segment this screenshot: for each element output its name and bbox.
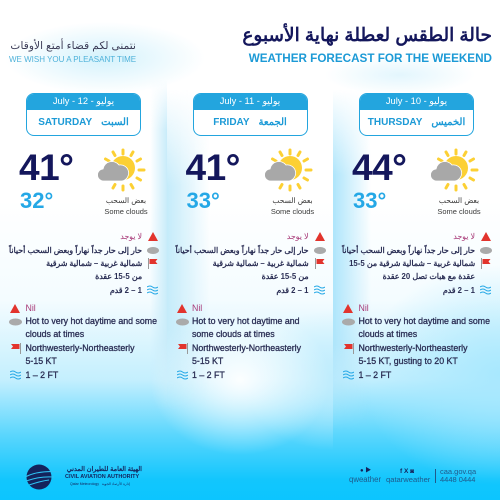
wind text: شمالية غربية – شمالية شرقية من 5-15: [349, 259, 475, 268]
weather text: Hot to very hot daytime and some: [26, 316, 157, 326]
date card: الخميس: [431, 117, 465, 128]
flag icon: [315, 258, 324, 269]
wave text: 1 – 2 قدم: [110, 286, 142, 295]
English details: [342, 302, 490, 380]
wind text: [358, 342, 468, 368]
wave text: 1 – 2 FT: [26, 370, 58, 380]
cloud icon: [314, 247, 326, 254]
divider: [435, 469, 436, 483]
app handle: qweather: [349, 474, 381, 484]
social icons: f X ◙: [400, 468, 414, 474]
wave icon: [177, 370, 188, 380]
panel: Thursday: [342, 93, 492, 380]
date card: [359, 93, 474, 136]
date card: THURSDAY: [368, 117, 422, 128]
wave icon: [480, 286, 491, 294]
wind text: شمالية غربية – شمالية شرقية: [46, 259, 142, 268]
warning icon: [343, 304, 353, 313]
warnings text: Nil: [358, 302, 369, 312]
weather text: حار إلى حار جداً نهاراً وبعض السحب أحياناً: [176, 246, 308, 255]
date card: [192, 93, 308, 136]
wave icon: [314, 286, 325, 294]
Arabic details: [175, 232, 326, 296]
heading: English title: WEATHER FORECAST FOR THE WEEKEND: [249, 52, 492, 65]
footer social and contact: [348, 466, 478, 494]
wind text: [192, 342, 302, 366]
high temperature: 41°: [186, 146, 240, 188]
icon: sun behind cloud: [265, 148, 312, 192]
phone: 4448 0444: [440, 474, 475, 484]
condition caption: Some clouds: [437, 207, 481, 216]
cloud icon: [147, 247, 159, 254]
panel: Friday: [175, 93, 326, 380]
weather text: some clouds at times: [192, 329, 275, 339]
date card: السبت: [101, 117, 129, 128]
condition caption: [437, 196, 481, 216]
icon: globe: [24, 464, 62, 490]
high temperature: 44°: [352, 146, 406, 188]
date card: الجمعة: [259, 117, 287, 128]
warning icon: [481, 232, 491, 241]
weather text: حار إلى حار جداً نهاراً وبعض السحب أحياناً: [9, 246, 142, 255]
wind text: 5-15 KT: [192, 356, 223, 366]
wind text: Northwesterly-Northeasterly: [358, 342, 468, 352]
icon: sun behind cloud: [431, 148, 478, 192]
weather text: حار إلى حار جداً نهاراً وبعض السحب أحياناً: [342, 246, 475, 255]
date card: FRIDAY: [213, 117, 250, 128]
wind text: [26, 342, 135, 366]
cloud icon: [9, 318, 22, 326]
wave icon: [343, 370, 354, 380]
department: Qatar Meteorology إدارة الأرصاد الجوية: [70, 482, 130, 486]
flag icon: [343, 343, 354, 354]
wind text: شمالية غربية – شمالية شرقية: [213, 259, 308, 268]
warning icon: [315, 232, 325, 241]
weather text: Hot to very hot daytime and: [192, 316, 300, 326]
authority name English: CIVIL AVIATION AUTHORITY: [65, 474, 139, 480]
wind text: Northwesterly-Northeasterly: [26, 342, 135, 352]
high temperature: 41°: [19, 146, 73, 188]
weather text: Hot to very hot daytime and some: [358, 316, 490, 326]
wind text: 5-15 KT: [26, 356, 57, 366]
date card: July - 11 - يوليو: [220, 96, 280, 106]
wave icon: [147, 286, 158, 294]
weather text: [26, 316, 157, 339]
icon: sun behind cloud: [98, 148, 146, 192]
weather text: [358, 315, 490, 342]
warnings text: Nil: [26, 302, 36, 312]
wind speed text: من 5-15 عقدة: [95, 272, 142, 281]
English details: [9, 302, 157, 380]
low temperature: 33°: [186, 188, 220, 213]
warnings text: Nil: [192, 302, 202, 312]
cloud icon: [480, 247, 492, 254]
wave text: 1 – 2 FT: [192, 370, 225, 380]
flag icon: [148, 258, 158, 269]
low temperature: 32°: [20, 188, 53, 213]
cloud icon: [342, 318, 355, 326]
condition caption: بعض السحب: [106, 196, 146, 205]
wave text: 1 – 2 قدم: [443, 286, 475, 295]
panel: Saturday: [8, 93, 159, 380]
condition caption: [104, 196, 148, 216]
app icons: ● ▶: [360, 468, 371, 474]
authority name Arabic: الهيئة العامة للطيران المدني: [67, 466, 142, 473]
weather text: [192, 316, 300, 339]
Arabic details: [342, 232, 492, 296]
date card: [26, 93, 141, 136]
warning icon: [148, 232, 158, 241]
warnings text: لا يوجد: [287, 232, 308, 241]
wave text: 1 – 2 قدم: [276, 286, 308, 295]
weather text: clouds at times: [26, 329, 84, 339]
wind speed text: عقدة مع هبات تصل 20 عقدة: [383, 272, 475, 281]
flag icon: [11, 343, 21, 354]
wind text: 5-15 KT, gusting to 20 KT: [358, 356, 458, 366]
warnings text: لا يوجد: [453, 232, 475, 241]
condition caption: Some clouds: [104, 207, 148, 216]
condition caption: [271, 196, 314, 216]
warnings text: لا يوجد: [120, 232, 142, 241]
wind speed text: من 5-15 عقدة: [262, 272, 308, 281]
wind text: Northwesterly-Northeasterly: [192, 342, 301, 352]
warning icon: [177, 304, 187, 313]
date card: July - 10 - يوليو: [386, 96, 447, 106]
date card: SATURDAY: [38, 117, 92, 128]
English details: [176, 302, 302, 380]
weather text: clouds at times: [358, 329, 417, 339]
low temperature: 33°: [353, 188, 386, 213]
footer logo: Civil Aviation Authority: [24, 462, 146, 492]
greeting: Arabic: نتمنى لكم قضاء أمتع الأوقات: [10, 40, 136, 52]
date card: July - 12 - يوليو: [53, 96, 114, 106]
greeting: English: WE WISH YOU A PLEASANT TIME: [9, 55, 136, 64]
flag icon: [178, 343, 188, 354]
cloud icon: [176, 318, 189, 326]
condition caption: بعض السحب: [439, 196, 479, 205]
warning icon: [10, 304, 20, 313]
wave text: 1 – 2 FT: [358, 370, 391, 380]
Arabic details: [8, 232, 159, 296]
social handle: qatarweather: [386, 474, 430, 484]
flag icon: [481, 258, 490, 269]
condition caption: Some clouds: [271, 207, 314, 216]
heading: Arabic title: حالة الطقس لعطلة نهاية الأسبوع: [242, 24, 492, 45]
website: caa.gov.qa: [440, 466, 476, 476]
wave icon: [10, 370, 21, 380]
condition caption: بعض السحب: [272, 196, 313, 205]
